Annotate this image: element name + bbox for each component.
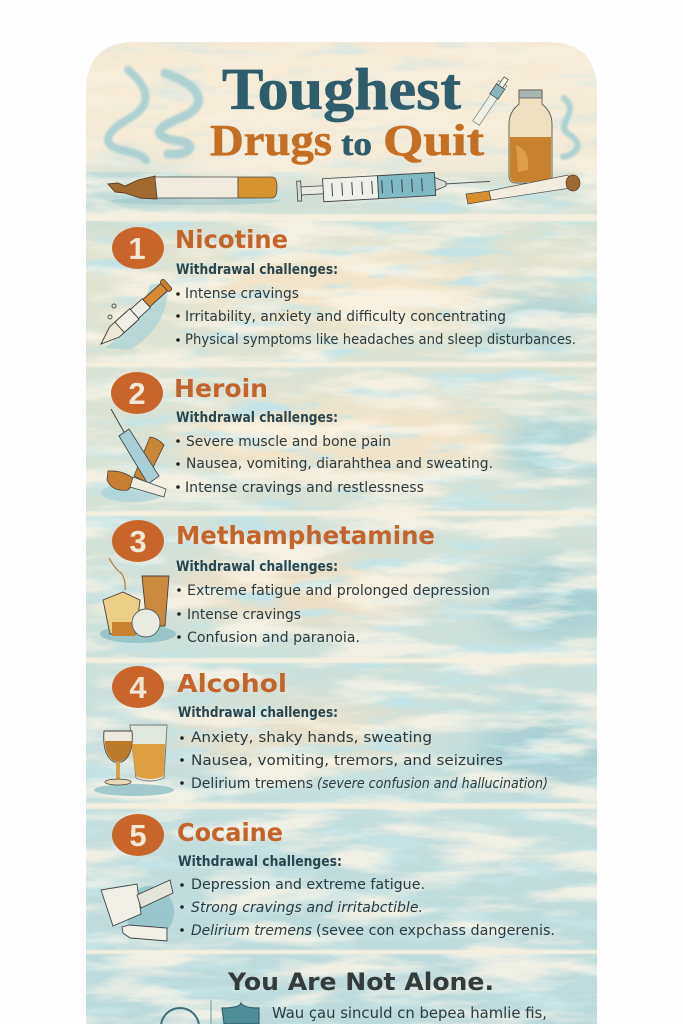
icon: syringe [297,169,491,203]
badge: 1 [112,227,164,269]
subheading: Withdrawal challenges: [176,262,338,278]
icon: glasses and pill [100,558,176,643]
icon: shield [222,1003,259,1024]
list: (severe confusion and hallucination) [317,776,548,792]
icon: smoke swirls [108,70,578,160]
title line: Drugs to Quit: Drugs [210,116,332,165]
footer text: Wau çau sinculd cn bepea hamlie fis, [272,1004,547,1022]
heading: You Are Not Alone: You Are Not Alone. [227,968,494,996]
list: Intense cravings [185,286,299,302]
badge: 4: 4 [129,670,147,705]
list: Anxiety, shaky hands, sweating [191,730,432,746]
badge: 4 [112,666,164,708]
badge: 3 [112,520,164,562]
footer [161,968,547,1024]
list: Extreme fatigue and prolonged depression [187,583,490,599]
badge: 2: 2 [128,376,146,411]
heading: Nicotine: Nicotine [175,225,288,254]
list: Strong cravings and irritabctible. [191,900,423,916]
icon: bottle [509,90,552,183]
list [177,583,490,646]
list: Confusion and paranoia. [187,630,360,646]
subheading: Withdrawal challenges: [176,559,338,575]
heading: Alcohol: Alcohol [177,669,287,698]
icon: small pen [472,75,510,126]
icon: tube and vial [101,880,174,941]
list: Physical symptoms like headaches and sleep disturbances. [185,332,576,348]
badge: 5 [112,814,164,856]
list [180,877,555,939]
panel: Methamphetamine [100,520,490,646]
panel: Cocaine [101,814,555,941]
list: Irritability, anxiety and difficulty concentrating [185,309,506,325]
subheading: Withdrawal challenges: [176,410,338,426]
subheading: Withdrawal challenges: [178,705,338,721]
heading: Methamphetamine: Methamphetamine [176,521,435,550]
list: (sevee con expchass dangerenis. [316,923,555,939]
list: Intense cravings and restlessness [185,480,424,496]
list: Nausea, vomiting, diarahthea and sweating. [186,456,493,472]
title [210,56,484,165]
title line: Toughest: Toughest [222,56,461,122]
list: Severe muscle and bone pain [186,434,391,450]
heading: Cocaine: Cocaine [177,818,283,847]
panel: Alcohol [94,666,548,796]
list: Delirium tremens [191,923,312,939]
title line: Drugs to Quit: to [341,126,372,163]
badge: 2 [111,372,163,414]
heading: Heroin: Heroin [174,374,268,403]
subheading: Withdrawal challenges: [178,854,342,870]
icon: cigarette [108,176,280,205]
badge: 3: 3 [129,524,147,559]
icon: syringe and capsule [101,409,166,502]
list: Delirium tremens [191,776,313,792]
list [180,730,548,792]
list: Nausea, vomiting, tremors, and seizuires [191,753,503,769]
list: Depression and extreme fatigue. [191,877,425,893]
icon: wine glass and tumbler [94,725,174,796]
title line: Drugs to Quit [210,116,484,165]
icon: rolled cigarette [466,175,580,204]
list [176,434,493,496]
list: Intense cravings [187,607,301,623]
panel: watercolor background [86,42,597,1024]
icon: magnifier [161,1008,199,1024]
badge: 1: 1 [128,231,146,266]
list [176,286,576,348]
title line: Drugs to Quit: Quit [383,116,484,165]
panel: Nicotine [96,225,576,350]
badge: 5: 5 [129,818,147,853]
icon: pen device [96,279,173,350]
panel: Heroin [101,372,493,502]
